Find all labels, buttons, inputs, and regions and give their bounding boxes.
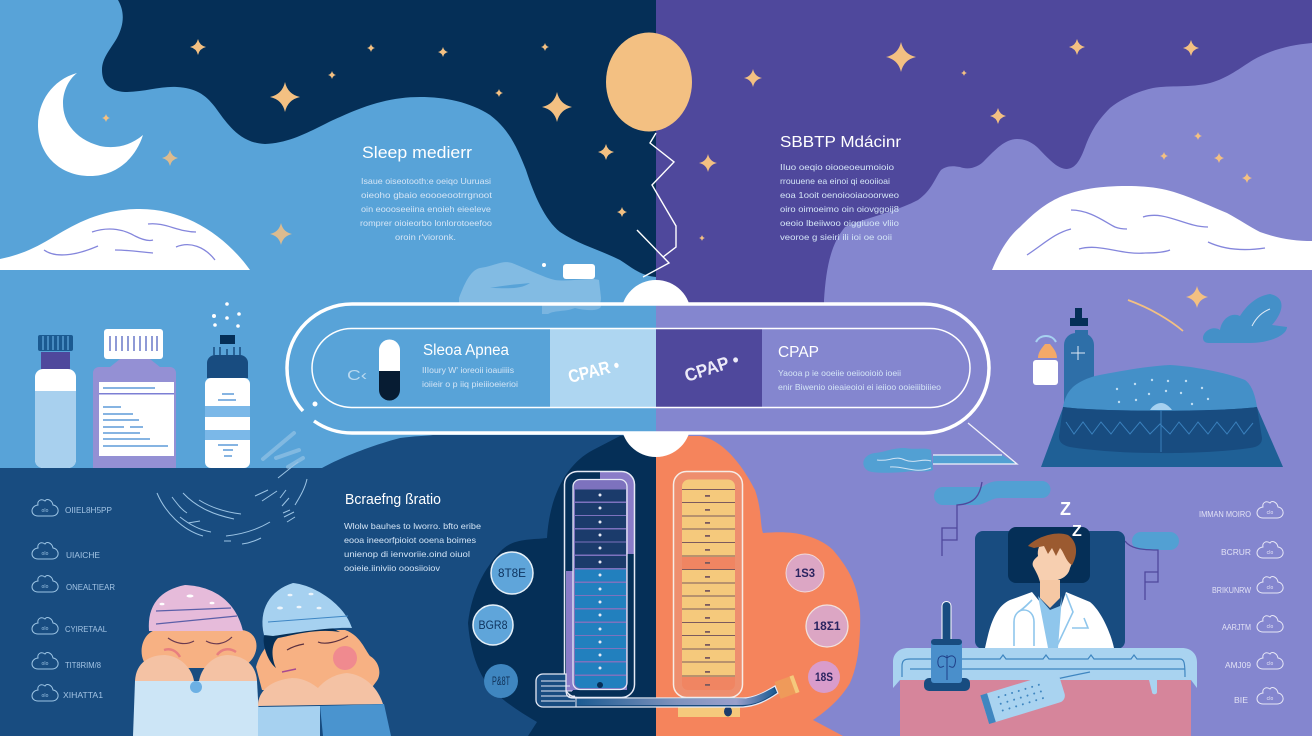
list: right treatment labels bbox=[1199, 502, 1283, 705]
text block: breathing ratio: Wlolw bauhes to lworro. bfto eribe bbox=[344, 521, 481, 531]
list item bbox=[1225, 653, 1283, 670]
list item: cIo bbox=[1267, 550, 1274, 556]
text block: sleep medicine body: oin eoooseeiina enoieh eieeleve bbox=[361, 204, 491, 214]
list item: cIo bbox=[1267, 696, 1274, 702]
list item: oIo bbox=[42, 508, 49, 514]
badges: right meter values bbox=[786, 554, 848, 693]
illustration: hospital bed bbox=[893, 648, 1197, 736]
breath lines bbox=[157, 462, 307, 544]
panel: central white circles bbox=[621, 280, 691, 457]
list item: cIo bbox=[1267, 585, 1274, 591]
icon: crescent moon bbox=[38, 73, 143, 176]
heading: CPAP medicine: SBBTP Mdácinr bbox=[780, 134, 902, 151]
text block: sleep medicine body: oroin r'vioronk. bbox=[395, 232, 456, 242]
badge bbox=[473, 605, 513, 645]
list item bbox=[1234, 688, 1283, 705]
text block: CPAP bbox=[778, 368, 941, 392]
badge bbox=[484, 664, 518, 698]
list item: oIo bbox=[42, 584, 49, 590]
badge: P&8T bbox=[492, 674, 510, 688]
illustration: sleeping person with blue cap bbox=[256, 583, 391, 736]
list item: oIo bbox=[42, 661, 49, 667]
list item: AMJ09 bbox=[1225, 660, 1251, 670]
list item bbox=[32, 685, 103, 701]
icon: spray bottle bbox=[205, 302, 250, 468]
panel: central lozenge bbox=[287, 304, 989, 433]
list item: oIo bbox=[42, 626, 49, 632]
list: left symptom labels bbox=[32, 500, 115, 701]
list item bbox=[1199, 502, 1283, 519]
text block: CPAP medicine body: rrouuene ea einoi qi eooiioai bbox=[780, 176, 890, 186]
callout: leader line and hose bbox=[863, 423, 1017, 473]
heading: sleep apnea: Sleoa Apnea bbox=[423, 342, 509, 359]
list item bbox=[32, 543, 100, 560]
text block: breathing ratio: eooa ineeorfpioiot ooena boimes bbox=[344, 535, 476, 545]
head and hair bbox=[1028, 533, 1076, 582]
icon: CPAP hose and connector bbox=[536, 674, 799, 717]
list item: ONEALTIEAR bbox=[66, 582, 115, 592]
list item: BCRUR bbox=[1221, 547, 1251, 557]
icon: sun bbox=[606, 32, 692, 132]
illustration: pale cloud with white box bbox=[459, 262, 601, 314]
hill: white left pillow bbox=[0, 209, 250, 270]
icon: shooting line bbox=[1128, 300, 1183, 331]
chart: left meter bbox=[564, 472, 635, 698]
panel: lavender right background bbox=[656, 0, 1312, 736]
list item bbox=[32, 576, 115, 592]
sun string bbox=[637, 133, 676, 277]
illustration: sleeping person with pink cap bbox=[133, 585, 260, 736]
list item bbox=[32, 653, 101, 670]
text block: CPAP medicine body: oeoio lbeiiwoo oiggiuoe vliio bbox=[780, 218, 899, 228]
text block: sleep medicine body: Isaue oiseotooth:e oeiqo Uuruasi bbox=[361, 176, 491, 186]
list item bbox=[32, 500, 112, 516]
icon: remote with keypad and cord bbox=[980, 672, 1090, 724]
heading: breathing ratio: Bcraefng ßratio bbox=[345, 492, 441, 508]
icon: capsule bbox=[379, 340, 400, 400]
icon: purple pill jar bbox=[93, 329, 176, 468]
text block: CPAP medicine body: IIuo oeqio oiooeoeumoioio bbox=[780, 162, 894, 172]
decorative motion streaks near shelf bbox=[263, 433, 303, 467]
hill: white right pillow bbox=[992, 186, 1312, 270]
badge: 8T8E bbox=[498, 566, 526, 580]
heading: CPAP: CPAP bbox=[778, 344, 819, 361]
text block: sleep apnea: IIIoury W' ioreoii ioauiiiis bbox=[422, 365, 514, 375]
panel: dark blue lower left bbox=[0, 435, 656, 736]
list item bbox=[32, 618, 107, 634]
badge: 18S bbox=[815, 670, 833, 684]
chart: right meter bbox=[674, 472, 742, 698]
text block: sleep apnea bbox=[422, 365, 518, 389]
heading: sleep medicine: Sleep medierr bbox=[362, 143, 472, 162]
label: CPAP light tab: CPAR • bbox=[566, 355, 621, 387]
pillow lines left bbox=[44, 224, 215, 260]
panel: sky-blue left background bbox=[0, 0, 656, 736]
illustration: blue CPAP mattress bbox=[1041, 365, 1283, 467]
list item: CYIRETAAL bbox=[65, 624, 107, 634]
list item: BRIKUNRW bbox=[1212, 585, 1251, 595]
list item: cIo bbox=[1267, 510, 1274, 516]
text block: sleep medicine body: oieoho gbaio eoooeootrrgnoot bbox=[361, 190, 493, 200]
list item bbox=[1221, 542, 1283, 558]
pillow lines right bbox=[1027, 210, 1265, 255]
badge bbox=[491, 552, 533, 594]
badges: left meter values bbox=[473, 552, 533, 698]
illustration: clouds with hanging brackets bbox=[934, 481, 1179, 600]
panel: navy blob behind left meter bbox=[468, 436, 656, 736]
text block: CPAP medicine body bbox=[780, 162, 899, 242]
text block: breathing ratio: ooieie.iiniviio ooosiioiov bbox=[344, 563, 441, 573]
list item: BIE bbox=[1234, 695, 1248, 705]
list item: oIo bbox=[42, 551, 49, 557]
text block: CPAP medicine body: oiro oimoeimo oin oiovggoij8 bbox=[780, 204, 899, 214]
stars bbox=[102, 39, 1252, 308]
text block: sleep apnea: ioiieir o p iiq pieiiioeierioi bbox=[422, 379, 518, 389]
text block: CPAP medicine body: eoa 1ooit oenoiooiaooorweo bbox=[780, 190, 899, 200]
icon: blue cloud bbox=[1203, 294, 1287, 343]
list item: XIHATTA1 bbox=[63, 690, 103, 700]
badge: 18Σ1 bbox=[814, 619, 841, 633]
text block: CPAP medicine body: veoroe g sieiri ili ioi oe ooii bbox=[780, 232, 892, 242]
text block: breathing ratio: unienop di ienvoriie.oind oiuol bbox=[344, 549, 470, 559]
list item: OIIEL8H5PP bbox=[65, 505, 112, 515]
icon: sleep Z letters: Z bbox=[1060, 499, 1071, 519]
badge: 1S3 bbox=[795, 566, 815, 580]
icon: sleep Z letters: Z bbox=[1072, 523, 1082, 540]
list item bbox=[1212, 577, 1283, 595]
text block: CPAP: Yaooa p ie ooeiie oeiiooioiò ioeii bbox=[778, 368, 901, 378]
list item: UIAICHE bbox=[66, 550, 100, 560]
list item bbox=[1222, 616, 1283, 632]
icon: bedside CPAP machine bbox=[924, 602, 970, 691]
capsule side marks: C‹ bbox=[347, 367, 367, 384]
text block: CPAP: enir Biwenio oieaieoioi ei ieiioo ooieiiibiiieo bbox=[778, 382, 941, 392]
list item: cIo bbox=[1267, 624, 1274, 630]
panel: orange blob behind right meter bbox=[656, 436, 860, 736]
text block: sleep medicine body bbox=[360, 176, 493, 242]
text block: sleep medicine body: romprer oioieorbo lonlorotoeefoo bbox=[360, 218, 492, 228]
list item: cIo bbox=[1267, 661, 1274, 667]
illustration: patient in lab coat bbox=[975, 527, 1125, 649]
list item: TIT8RIM/8 bbox=[65, 660, 101, 670]
list item: IMMAN MOIRO bbox=[1199, 509, 1251, 519]
badge: BGR8 bbox=[478, 618, 508, 632]
icon: sleep Z letters bbox=[1060, 499, 1082, 540]
list item: AARJTM bbox=[1222, 622, 1251, 632]
illustration: bottle and small jar bbox=[1033, 308, 1094, 415]
panel: navy night sky bbox=[102, 0, 656, 277]
panel: indigo night sky bbox=[656, 0, 1312, 310]
text block: breathing ratio bbox=[344, 521, 481, 573]
list item: oIo bbox=[42, 693, 49, 699]
label: CPAP dark tab: CPAP • bbox=[682, 349, 741, 386]
icon: bottle with blue liquid bbox=[35, 335, 76, 468]
